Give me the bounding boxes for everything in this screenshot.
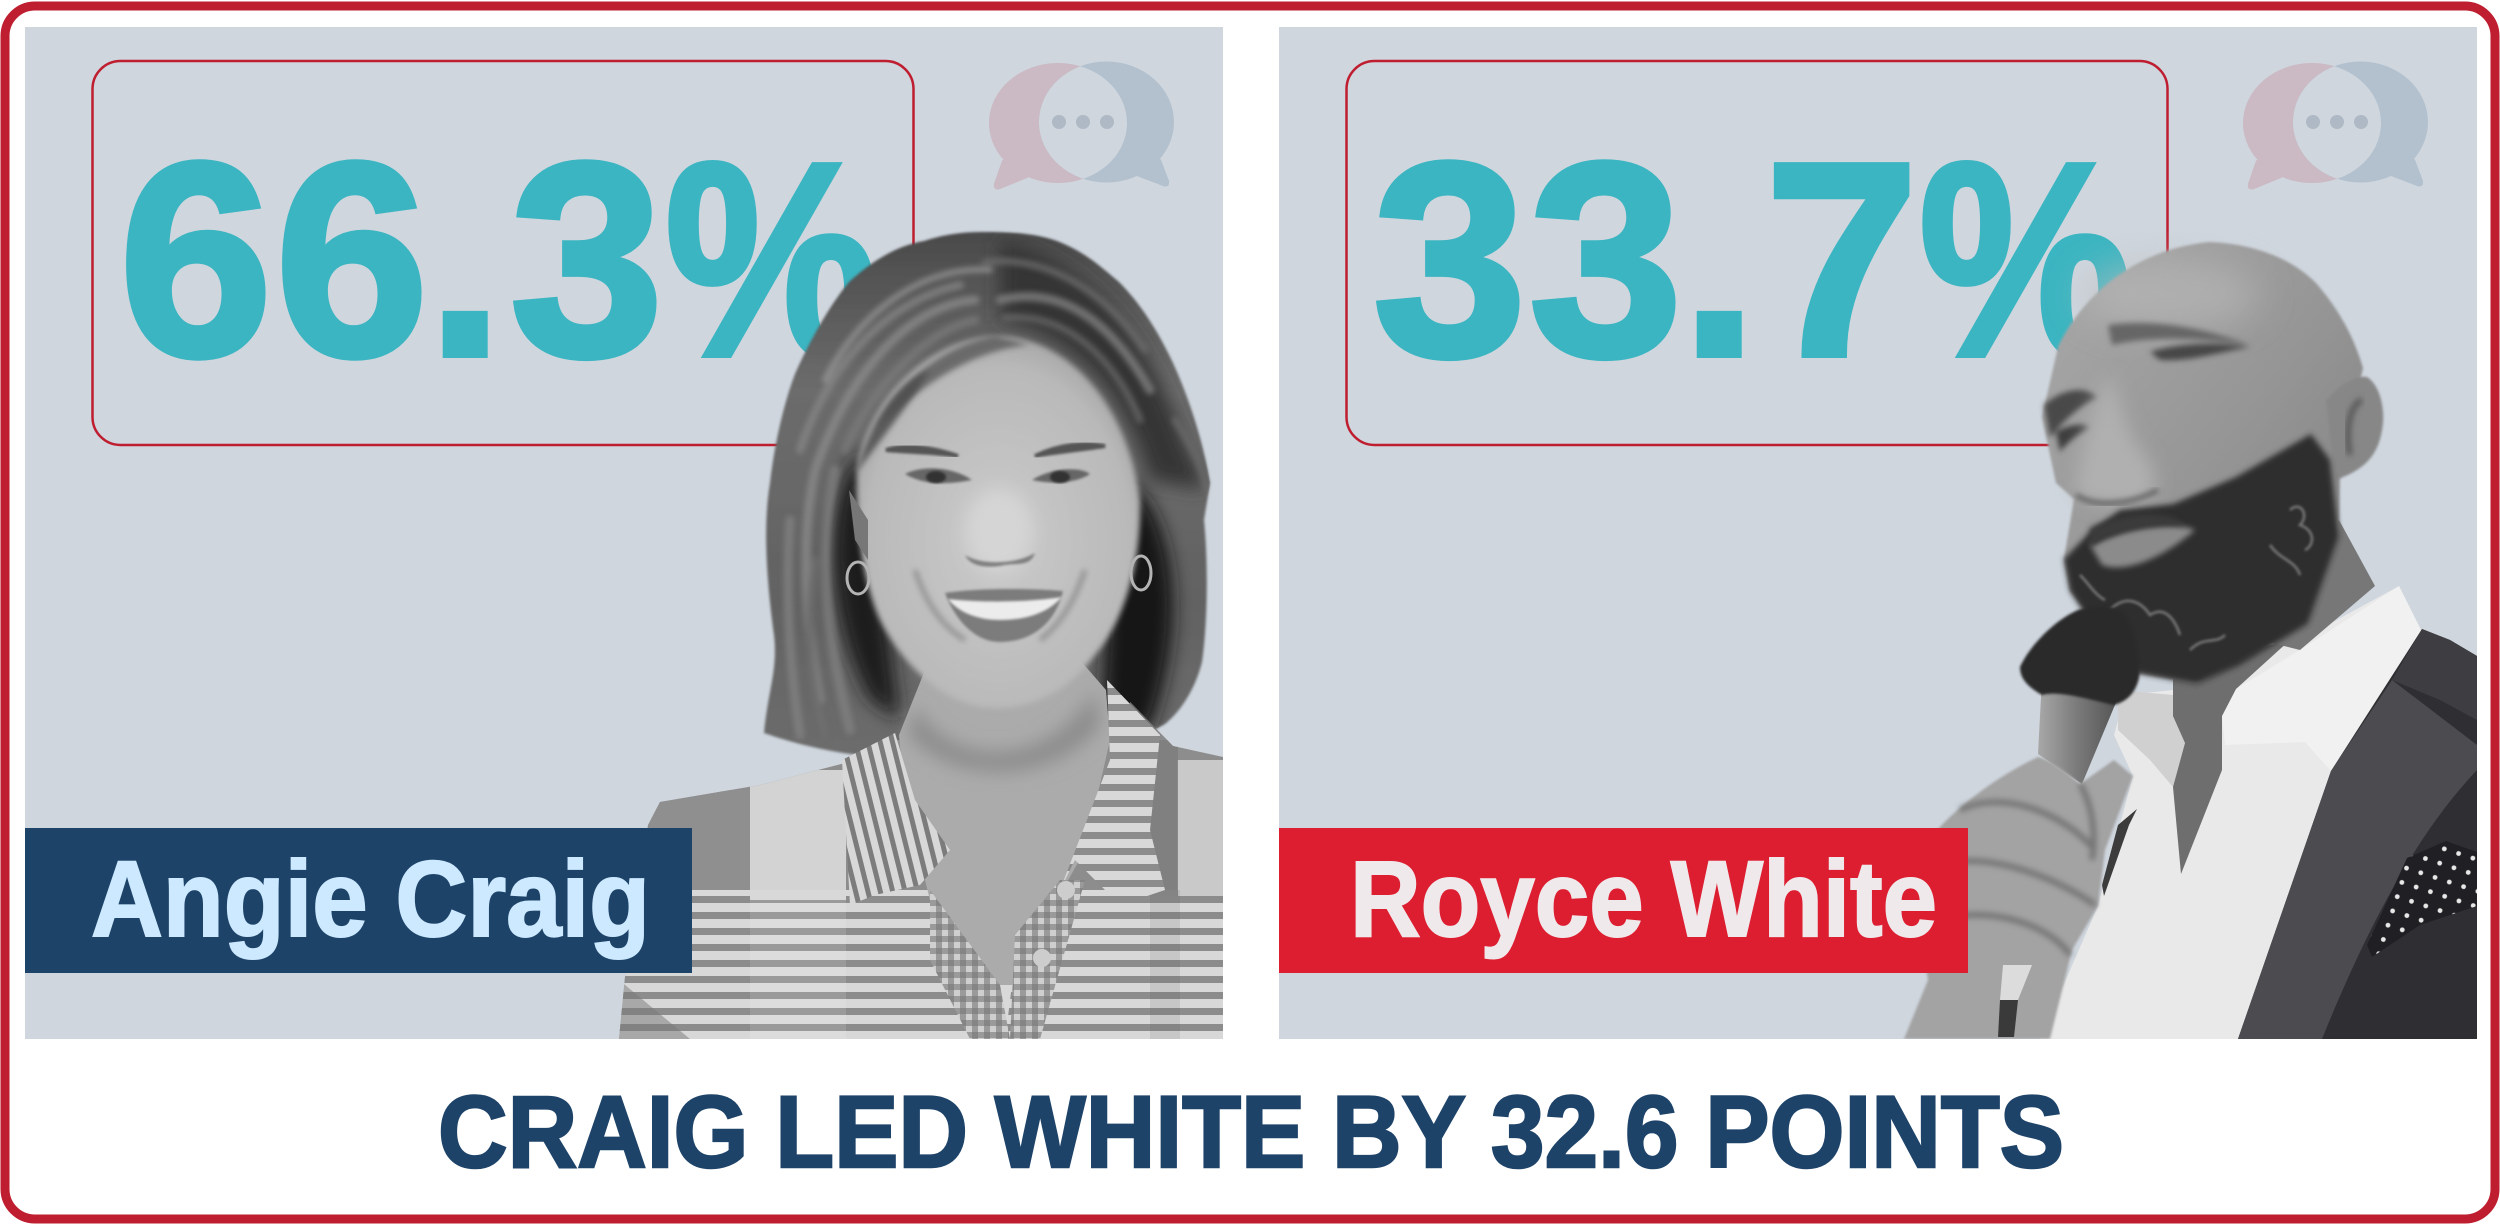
percentage value: 66.3 (119, 106, 664, 414)
portrait: Royce White (1904, 242, 2477, 1039)
portrait: Angie Craig (610, 232, 1230, 1040)
ears and earrings (847, 490, 1151, 594)
percentage box (92, 61, 914, 445)
headline: CRAIG LED WHITE BY 32.6 POINTS (438, 1075, 2064, 1189)
face (847, 336, 1151, 708)
panel: Royce White (1279, 27, 2477, 1039)
beard (2064, 434, 2339, 684)
nose (2074, 375, 2158, 505)
pocket square (2367, 841, 2477, 957)
percentage value: 33.7 (1373, 106, 1918, 414)
percentage value: % (1919, 105, 2133, 414)
name label: Angie Craig: Angie Craig (91, 838, 650, 959)
ear (2338, 375, 2385, 480)
hand (1904, 757, 2133, 1039)
jacket (2238, 629, 2477, 1039)
icon: overlapping speech bubbles (2243, 62, 2428, 188)
percentage value: % (665, 105, 879, 414)
neck (2173, 640, 2290, 874)
neck and chest (899, 660, 1110, 985)
percentage box (1346, 61, 2168, 445)
name label: Royce White: Royce White (1350, 838, 1937, 959)
shirt (2040, 586, 2422, 1039)
hair (764, 232, 1210, 760)
panel: Angie Craig (25, 27, 1230, 1040)
brows and eyes (2044, 323, 2250, 452)
eyes and brows (886, 444, 1105, 483)
microphone base (2000, 965, 2032, 1000)
icon: overlapping speech bubbles (989, 62, 1174, 188)
smile (915, 570, 1085, 642)
nose (965, 488, 1035, 572)
shirt (610, 700, 1230, 1040)
collar (842, 680, 1165, 1039)
microphone (2020, 607, 2140, 784)
head (2042, 242, 2383, 684)
